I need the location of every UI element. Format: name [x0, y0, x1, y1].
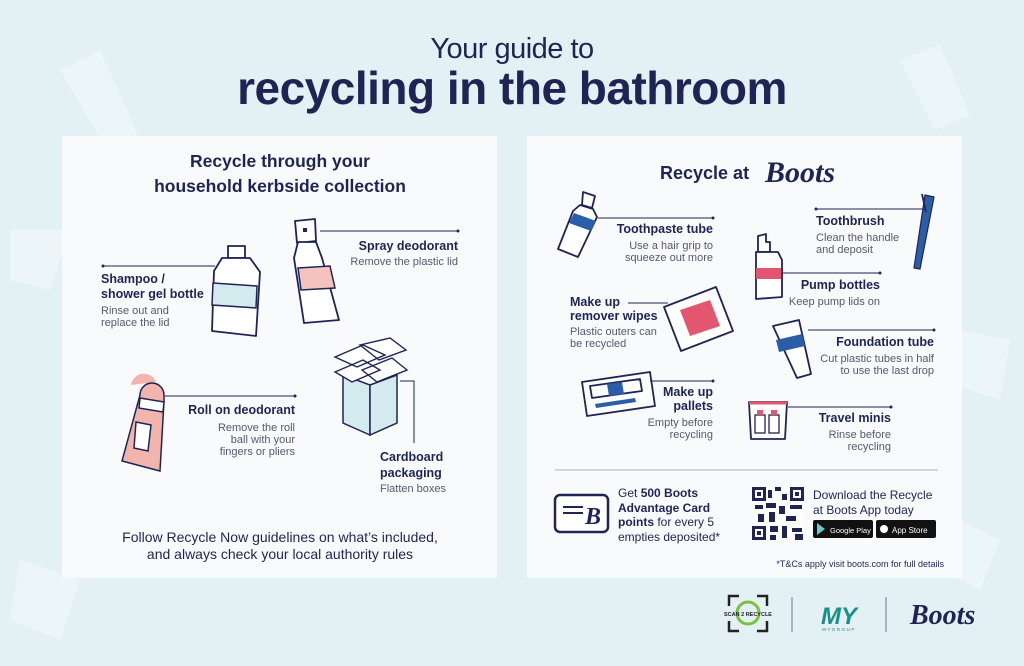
title [237, 33, 787, 114]
item: foundation tube [773, 320, 936, 378]
item: shampoo bottle: shower gel bottle [101, 287, 204, 301]
T&Cs note: *T&Cs apply visit boots.com for full details [776, 559, 944, 569]
item: toothpaste tube: Toothpaste tube [617, 222, 713, 236]
footer text: guidelines: and always check your local authority rules [147, 546, 413, 562]
heading: kerbside: Recycle through your [190, 151, 370, 171]
item: roll on deodorant: fingers or pliers [220, 446, 295, 458]
title: Your guide to [430, 33, 594, 65]
item: cardboard box [335, 338, 447, 495]
item: shampoo bottle [101, 246, 260, 336]
item: pump bottles [756, 234, 882, 308]
item: roll on deodorant [122, 374, 296, 471]
item: spray deodorant [294, 219, 460, 323]
item: toothpaste tube: squeeze out more [625, 252, 713, 264]
item: cardboard box: packaging [380, 466, 442, 480]
badge: google play [813, 520, 873, 538]
item: spray deodorant: Spray deodorant [359, 239, 459, 253]
advantage card offer: points for every 5 [618, 515, 714, 529]
item: shampoo bottle: Shampoo / [101, 272, 165, 286]
badge: app store [876, 520, 936, 538]
item: toothbrush: Toothbrush [816, 214, 884, 228]
item: toothpaste tube: Use a hair grip to [629, 240, 713, 252]
item: cardboard box: Cardboard [380, 450, 443, 464]
item: toothbrush: Clean the handle [816, 232, 899, 244]
item: foundation tube: Foundation tube [836, 335, 934, 349]
title: recycling in the bathroom [237, 62, 787, 114]
item: roll on deodorant: ball with your [231, 434, 295, 446]
heading: kerbside [154, 151, 406, 196]
item: make up pallets: Make up [663, 385, 713, 399]
item: toothbrush: and deposit [816, 244, 873, 256]
item: toothpaste tube [558, 192, 714, 264]
badge: google play: Google Play [830, 526, 871, 535]
footer logos [724, 596, 975, 632]
item: cardboard box: Flatten boxes [380, 483, 447, 495]
logo: MY group: MYGROUP [822, 627, 856, 632]
item: make up pallets: Empty before [648, 417, 713, 429]
footer text: guidelines [122, 529, 438, 562]
item: travel minis: Travel minis [819, 411, 891, 425]
item: travel minis: recycling [848, 441, 891, 453]
QR code and app download [752, 487, 936, 540]
advantage card offer: empties deposited* [618, 530, 720, 544]
item: make up remover wipes: remover wipes [570, 309, 658, 323]
item: make up pallets: pallets [673, 399, 713, 413]
item: spray deodorant: Remove the plastic lid [350, 256, 458, 268]
QR code and app download: at Boots App today [813, 503, 914, 517]
item: make up pallets: recycling [670, 429, 713, 441]
item: travel minis [749, 402, 892, 453]
item: roll on deodorant: Remove the roll [218, 422, 295, 434]
item: shampoo bottle: replace the lid [101, 317, 170, 329]
advantage card offer: Advantage Card [618, 501, 710, 515]
item: foundation tube: to use the last drop [840, 365, 934, 377]
panel: kerbside collection [62, 136, 497, 578]
logo: Boots: Boots [909, 600, 975, 631]
heading: recycle at boots [660, 156, 835, 189]
item: pump bottles: Pump bottles [801, 278, 880, 292]
item: make up remover wipes: be recycled [570, 338, 626, 350]
heading: recycle at boots: Recycle at [660, 163, 749, 183]
item: shampoo bottle: Rinse out and [101, 305, 169, 317]
advantage card offer: B [584, 504, 601, 530]
item: make up remover wipes [570, 287, 733, 351]
heading: recycle at boots: Boots [764, 156, 835, 189]
badge: app store: App Store [892, 526, 928, 535]
logo: MY group: MY [821, 603, 859, 630]
logo: scan 2 recycle [724, 596, 772, 631]
item: make up remover wipes: Plastic outers can [570, 326, 657, 338]
panel: recycle at Boots [527, 136, 962, 578]
advantage card offer: Get 500 Boots [618, 486, 698, 500]
advantage card offer [555, 486, 720, 544]
heading: kerbside: household kerbside collection [154, 176, 406, 196]
item: toothbrush [814, 194, 934, 269]
item: make up pallets [582, 372, 714, 441]
item: foundation tube: Cut plastic tubes in half [820, 353, 935, 365]
item: travel minis: Rinse before [829, 429, 891, 441]
logo: scan 2 recycle: SCAN 2 RECYCLE [724, 612, 772, 618]
footer text: guidelines: Follow Recycle Now guidelines on what’s included, [122, 529, 438, 545]
item: make up remover wipes: Make up [570, 295, 620, 309]
QR code and app download: Download the Recycle [813, 488, 933, 502]
item: pump bottles: Keep pump lids on [789, 296, 880, 308]
item: roll on deodorant: Roll on deodorant [188, 403, 296, 417]
